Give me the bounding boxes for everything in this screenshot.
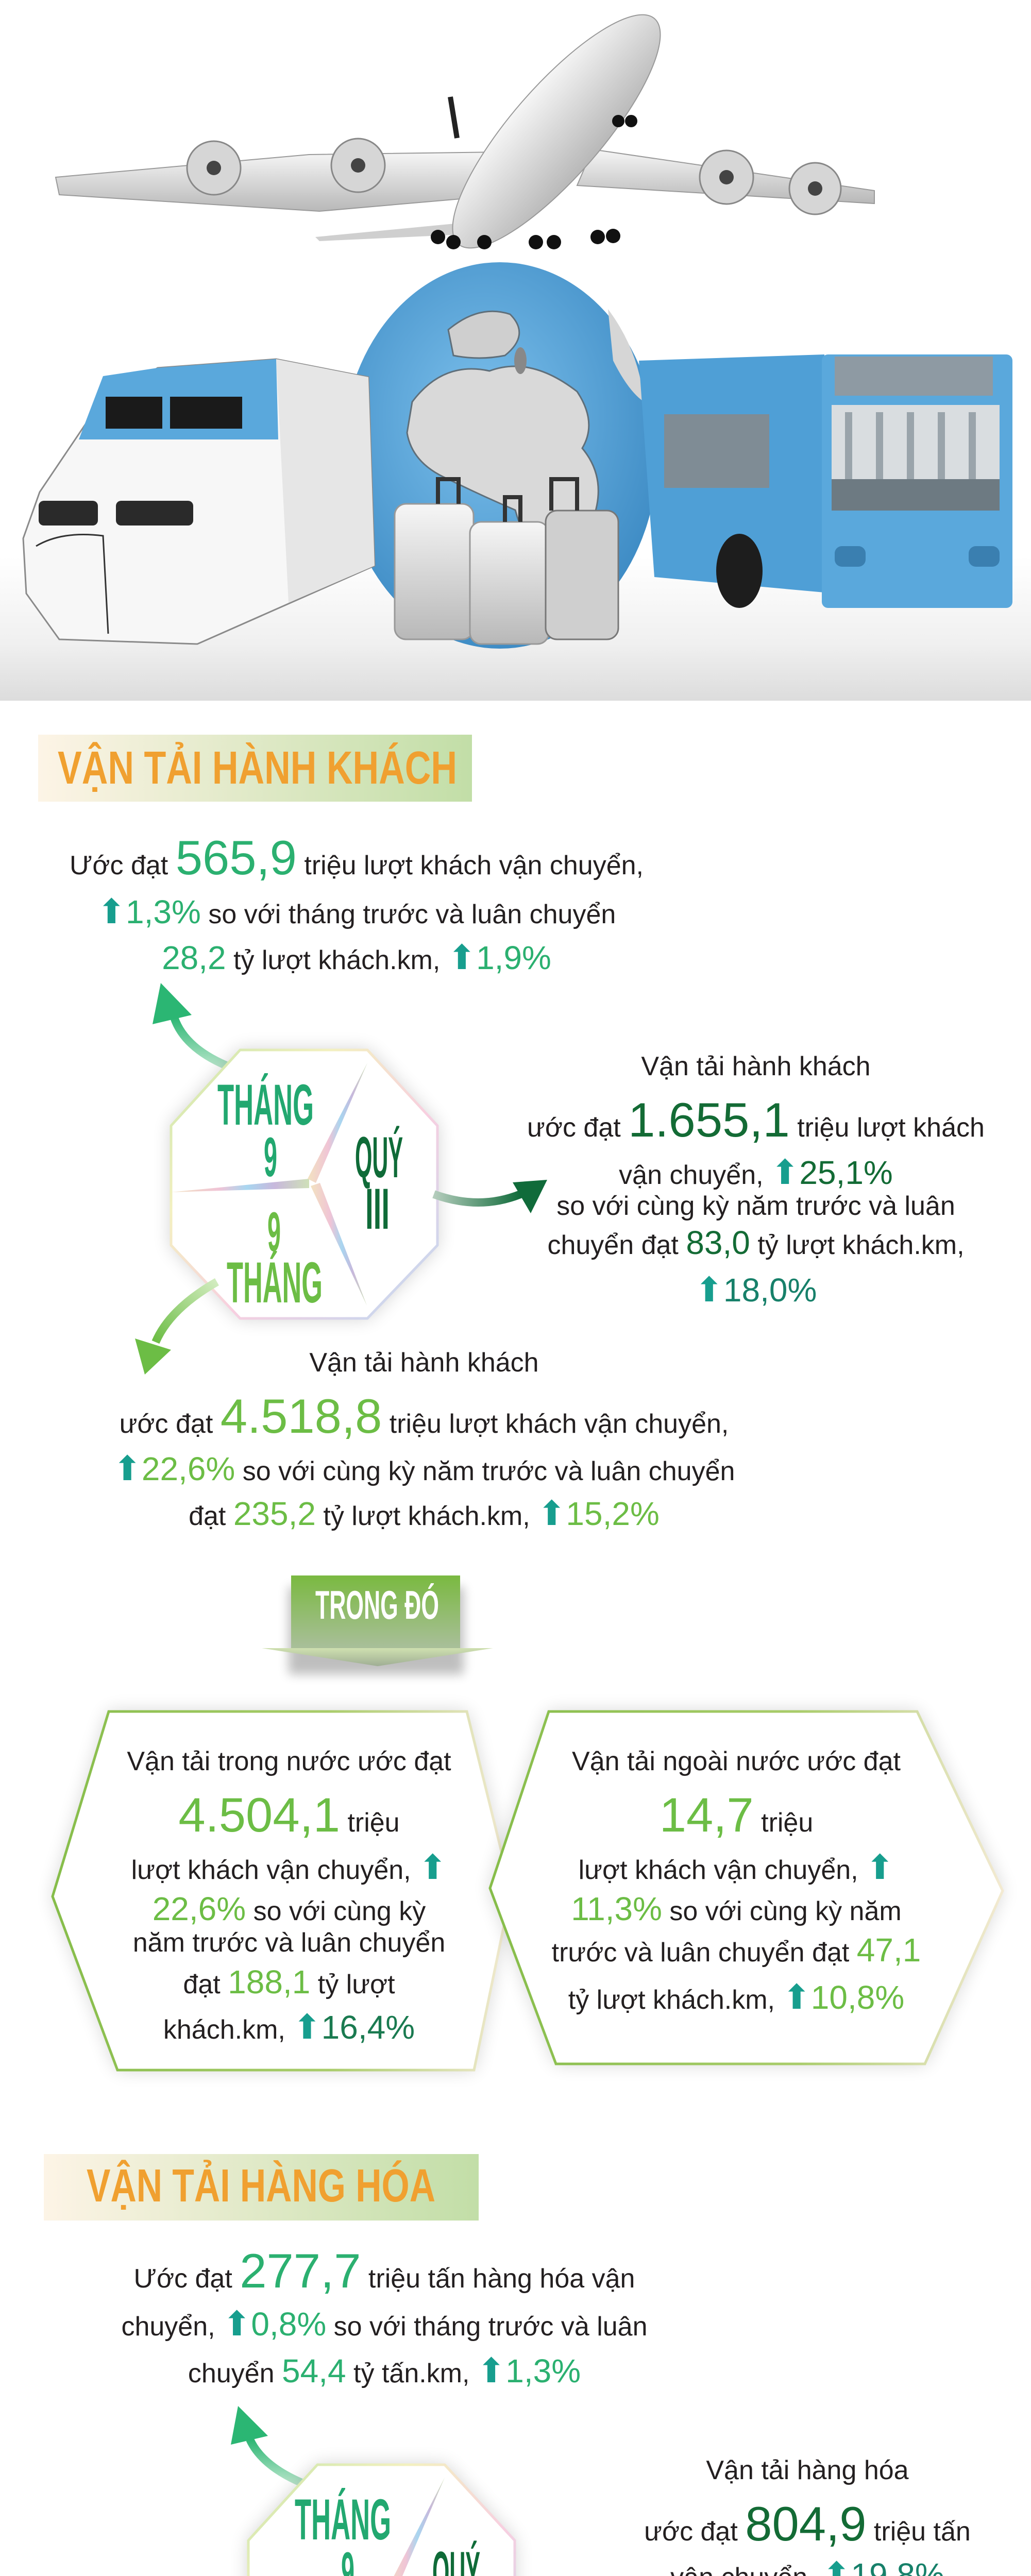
octagon: THÁNG 9 / QUÝ III / 9 THÁNG: 9 xyxy=(267,1200,281,1263)
text block: monthly cargo: chuyển, ⬆0,8% so với tháng trước và luân xyxy=(121,2304,648,2344)
text block: quarter III passenger: chuyển đạt 83,0 tỷ lượt khách.km, xyxy=(547,1224,965,1261)
text block: monthly passenger: Ước đạt 565,9 triệu lượt khách vận chuyển, xyxy=(70,831,644,885)
callout: TRONG ĐÓ xyxy=(262,1575,493,1674)
text block: 9 months passenger: đạt 235,2 tỷ lượt khách.km, ⬆15,2% xyxy=(189,1494,660,1533)
icon: globe xyxy=(342,262,657,649)
text block: quarter III cargo: ước đạt 804,9 triệu tấn xyxy=(644,2497,971,2551)
panel: domestic passenger: khách.km, ⬆16,4% xyxy=(163,2007,415,2047)
heading: VẬN TẢI HÀNG HÓA: VẬN TẢI HÀNG HÓA xyxy=(87,2159,435,2212)
panel: international passenger: trước và luân chuyển đạt 47,1 xyxy=(552,1931,921,1969)
callout: TRONG ĐÓ: TRONG ĐÓ xyxy=(315,1582,439,1628)
text block: quarter III passenger xyxy=(527,1052,985,1310)
octagon: THÁNG 9 / QUÝ III / 9 THÁNG xyxy=(171,1050,437,1318)
panel: domestic passenger: 22,6% so với cùng kỳ xyxy=(153,1890,426,1927)
text block: monthly cargo: chuyển 54,4 tỷ tấn.km, ⬆1,3% xyxy=(188,2351,581,2391)
text block: quarter III cargo: Vận tải hàng hóa xyxy=(706,2455,909,2485)
panel: domestic passenger: 4.504,1 triệu xyxy=(178,1788,400,1842)
panel: domestic passenger: Vận tải trong nước ước đạt xyxy=(127,1747,451,1776)
text block: quarter III passenger: Vận tải hành khách xyxy=(641,1052,871,1081)
panel: domestic passenger: đạt 188,1 tỷ lượt xyxy=(183,1963,395,2001)
text block: quarter III passenger: vận chuyển, ⬆25,1% xyxy=(619,1153,893,1192)
panel: international passenger: lượt khách vận chuyển, ⬆ xyxy=(579,1848,894,1887)
icon: bus xyxy=(639,354,1012,608)
panel: domestic passenger: lượt khách vận chuyển, ⬆ xyxy=(131,1848,447,1887)
panel: international passenger: 14,7 triệu xyxy=(660,1788,813,1842)
panel: international passenger: Vận tải ngoài nước ước đạt xyxy=(572,1747,901,1776)
icon: luggage xyxy=(395,479,618,644)
octagon: THÁNG 9 / QUÝ III / 9 THÁNG: 9 xyxy=(264,1126,277,1188)
text block: quarter III passenger: ⬆18,0% xyxy=(695,1270,817,1310)
arrow: right to quarter xyxy=(434,1180,547,1213)
panel: domestic passenger xyxy=(53,1711,511,2070)
panel: international passenger: tỷ lượt khách.km, ⬆10,8% xyxy=(568,1977,904,2017)
arrow: up-left to monthly xyxy=(153,983,236,1070)
icon: airplane xyxy=(56,0,874,274)
text block: monthly cargo: Ước đạt 277,7 triệu tấn hàng hóa vận xyxy=(134,2244,635,2298)
text block: quarter III cargo xyxy=(629,2455,986,2576)
text block: monthly passenger: 28,2 tỷ lượt khách.km, ⬆1,9% xyxy=(162,938,551,977)
text block: monthly passenger: ⬆1,3% so với tháng trước và luân chuyển xyxy=(97,892,616,931)
text block: 9 months passenger: ước đạt 4.518,8 triệu lượt khách vận chuyển, xyxy=(120,1389,729,1443)
octagon: cargo periods: THÁNG xyxy=(295,2487,391,2552)
heading: VẬN TẢI HÀNG HÓA xyxy=(44,2154,479,2221)
octagon: THÁNG 9 / QUÝ III / 9 THÁNG: III xyxy=(365,1177,390,1241)
icon: train xyxy=(23,359,375,644)
octagon: THÁNG 9 / QUÝ III / 9 THÁNG: THÁNG xyxy=(217,1073,314,1137)
text block: quarter III passenger: ước đạt 1.655,1 triệu lượt khách xyxy=(527,1093,985,1147)
text block: 9 months passenger xyxy=(113,1348,735,1533)
heading: VẬN TẢI HÀNH KHÁCH xyxy=(38,735,472,802)
octagon: THÁNG 9 / QUÝ III / 9 THÁNG: THÁNG xyxy=(227,1250,323,1315)
panel: international passenger: 11,3% so với cùng kỳ năm xyxy=(571,1890,902,1927)
text block: 9 months passenger: ⬆22,6% so với cùng kỳ năm trước và luân chuyển xyxy=(113,1449,735,1488)
octagon: cargo periods xyxy=(248,2465,515,2576)
heading: VẬN TẢI HÀNH KHÁCH: VẬN TẢI HÀNH KHÁCH xyxy=(58,741,457,794)
text block: quarter III passenger: so với cùng kỳ năm trước và luân xyxy=(556,1191,955,1221)
panel: international passenger xyxy=(490,1711,1003,2064)
arrow: up-left to monthly cargo xyxy=(231,2406,309,2486)
hero illustration: airplane, globe, train, bus, luggage xyxy=(0,0,1031,701)
text block: monthly cargo xyxy=(121,2244,648,2391)
octagon: THÁNG 9 / QUÝ III / 9 THÁNG: QUÝ xyxy=(355,1125,403,1190)
text block: 9 months passenger: Vận tải hành khách xyxy=(309,1348,539,1378)
text block: monthly passenger xyxy=(70,831,644,977)
panel: domestic passenger: năm trước và luân chuyển xyxy=(133,1928,445,1958)
arrow: down-left to 9 months xyxy=(135,1282,217,1375)
